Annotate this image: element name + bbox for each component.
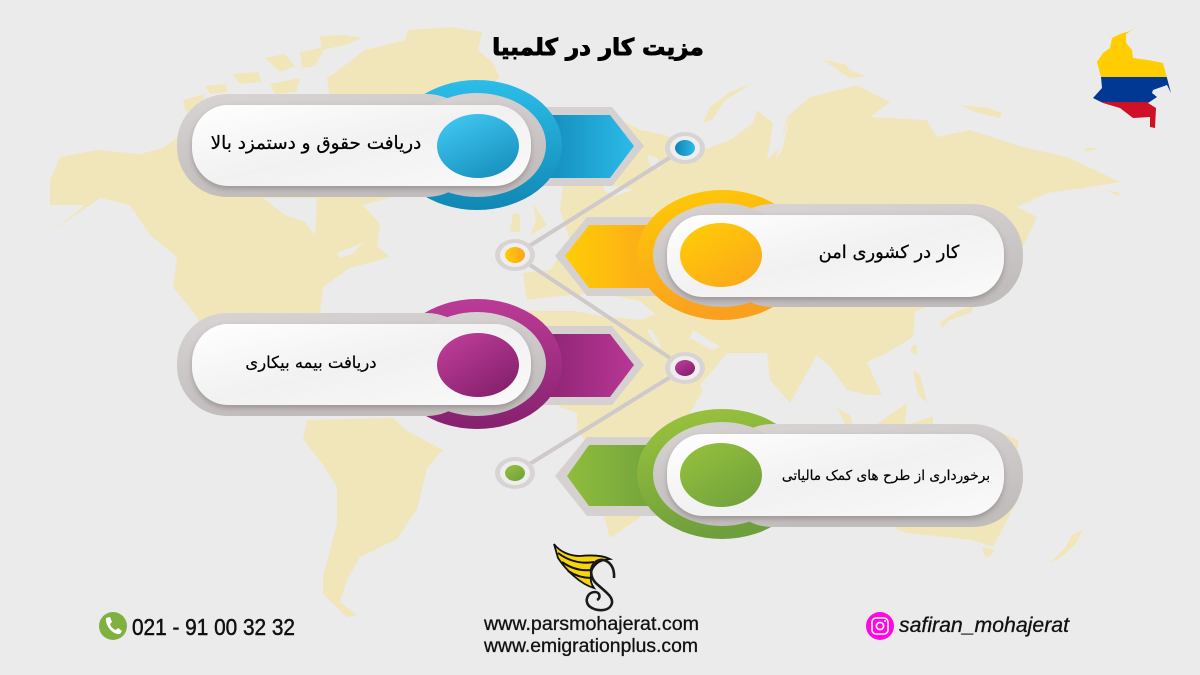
node: green — [495, 457, 535, 489]
label: safe country: کار در کشوری امن — [819, 242, 960, 263]
colombia flag map — [1093, 26, 1171, 128]
node: yellow — [495, 239, 535, 271]
contact: phone — [99, 612, 295, 640]
icon: phone — [99, 612, 127, 640]
website two: www.emigrationplus.com — [483, 635, 698, 657]
contact: instagram — [866, 612, 1070, 640]
instagram handle: safiran_mohajerat — [899, 614, 1070, 637]
contact: websites — [483, 613, 699, 657]
label: high salary: دریافت حقوق و دستمزد بالا — [211, 133, 421, 154]
card: unemployment insurance (purple) — [177, 299, 644, 429]
connector lines — [515, 148, 685, 473]
phone number: 021 - 91 00 32 32 — [132, 614, 295, 640]
label: unemployment insurance: دریافت بیمه بیکاری — [245, 353, 377, 373]
world map — [50, 27, 1120, 617]
node: purple — [665, 352, 705, 384]
website one: www.parsmohajerat.com — [483, 613, 699, 635]
card: high salary (blue) — [177, 80, 644, 210]
card: safe country (yellow) — [555, 190, 1023, 320]
logo — [554, 544, 614, 610]
title: مزیت کار در کلمبیا — [492, 35, 704, 61]
node: blue — [665, 132, 705, 164]
icon: instagram — [866, 612, 894, 640]
card: tax assistance (green) — [555, 409, 1023, 539]
label: tax assistance: برخورداری از طرح های کمک مالیاتی — [782, 468, 990, 484]
map seas — [263, 115, 790, 350]
